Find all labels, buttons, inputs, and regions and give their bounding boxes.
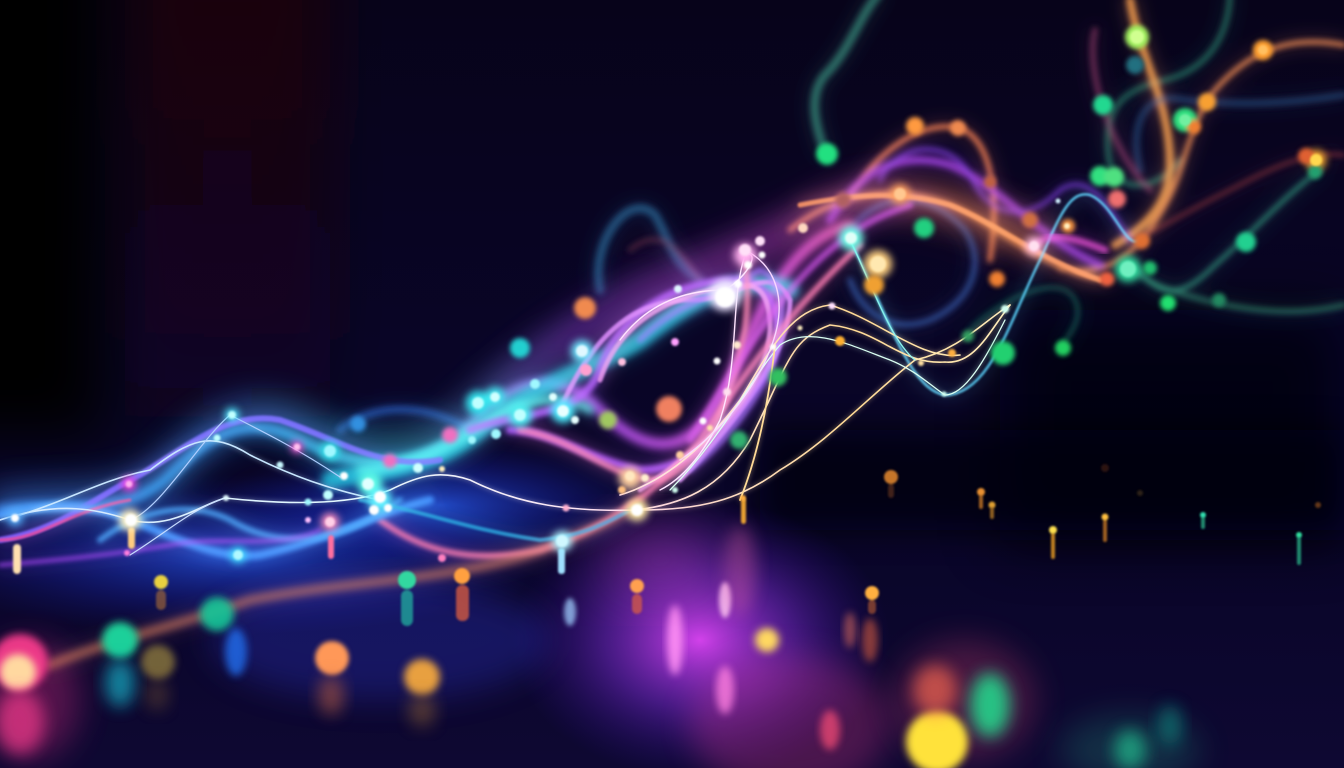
- glowing dots: halos along strands: [7, 150, 1326, 563]
- floor glow: reflected colour pools: [0, 440, 1200, 768]
- large bokeh dots: foreground floor: [0, 525, 1182, 768]
- blurred coloured beads: [350, 25, 1322, 468]
- small floor lights and reflections: [13, 464, 1321, 626]
- soft halo: duplicated ribbon glow: [0, 194, 1140, 665]
- main wave: broad glowing ribbon: [0, 194, 1140, 665]
- sharp wires: thin bright fibres: [0, 240, 1010, 555]
- soft halo: duplicated strand glow: [340, 0, 1344, 430]
- bright bead cores: [11, 30, 1322, 562]
- wire glow: [0, 240, 1010, 555]
- far blurred strands: upper right: [340, 0, 1344, 430]
